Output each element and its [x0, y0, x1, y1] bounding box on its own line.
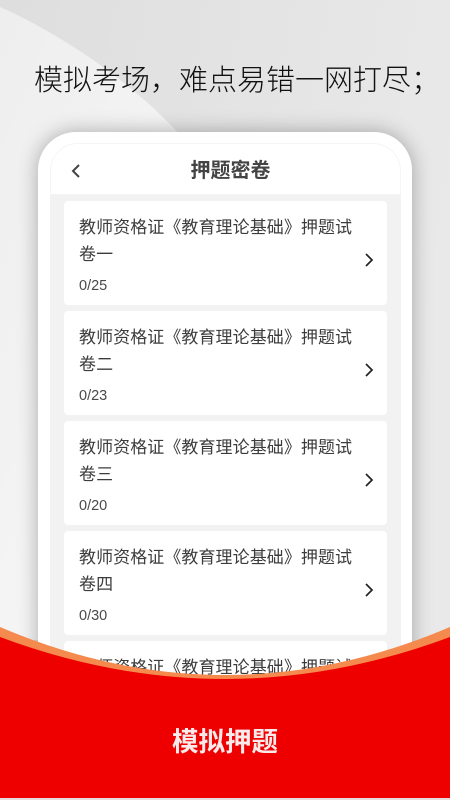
phone mockup — [38, 132, 412, 732]
card 5 partially hidden: 卷五 — [79, 684, 113, 704]
app header — [50, 143, 401, 195]
card 1 — [64, 201, 387, 305]
card 3: 教师资格证《教育理论基础》押题试 — [79, 438, 352, 457]
card 5 partially hidden: 教师资格证《教育理论基础》押题试 — [79, 658, 352, 677]
red curved footer — [0, 627, 450, 800]
card 2: 0/23 — [79, 388, 107, 404]
card 1: 0/25 — [79, 278, 107, 294]
card 2: 教师资格证《教育理论基础》押题试 — [79, 328, 352, 347]
header title: 押题密卷 — [190, 160, 270, 182]
card 5 partially hidden — [64, 641, 387, 745]
card 4: 教师资格证《教育理论基础》押题试 — [79, 548, 352, 567]
footer label: 模拟押题 — [172, 727, 278, 757]
card 1: 教师资格证《教育理论基础》押题试 — [79, 218, 352, 237]
card 2 — [64, 311, 387, 415]
card 1: 卷一 — [79, 244, 113, 264]
card 3: 卷三 — [79, 464, 113, 484]
card 3: 0/20 — [79, 498, 107, 514]
headline: 模拟考场，难点易错一网打尽； — [34, 65, 440, 97]
card 4: 卷四 — [79, 574, 113, 594]
phone screen — [50, 143, 401, 732]
back arrow — [72, 164, 80, 178]
card 2: 卷二 — [79, 354, 113, 374]
card 3 — [64, 421, 387, 525]
card 4: 0/30 — [79, 608, 107, 624]
card 4 — [64, 531, 387, 635]
